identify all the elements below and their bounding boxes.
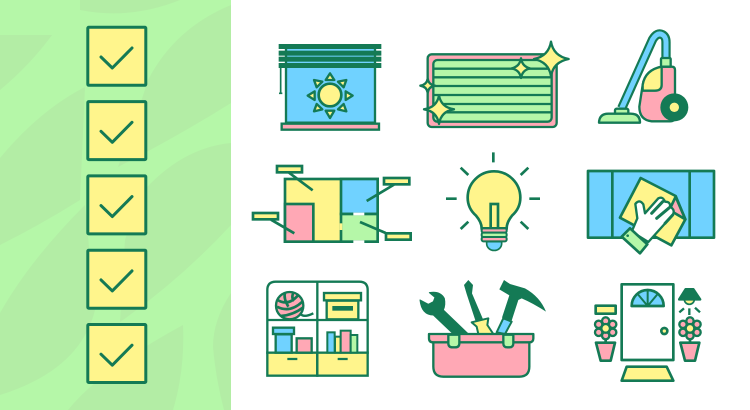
yarn ball (276, 292, 313, 319)
icon: storage shelf (267, 282, 368, 376)
icon: front door with flowers (595, 284, 701, 381)
icon: floor plan (253, 166, 411, 242)
left flower and pot (595, 317, 616, 361)
storage box (324, 293, 361, 319)
icon: light bulb (446, 152, 540, 250)
porch lamp (679, 289, 700, 315)
screwdriver (464, 280, 493, 334)
icon: window blinds with sun (279, 44, 381, 130)
fan window (632, 290, 664, 306)
right flower and pot (679, 317, 701, 361)
icon: hand wiping window (588, 171, 714, 253)
icon: sparkling clean blinds (420, 42, 569, 127)
wrench (420, 292, 468, 334)
checkbox 1 (88, 27, 146, 85)
icon: vacuum cleaner (599, 34, 688, 123)
checkbox 5 (88, 324, 146, 382)
hammer (497, 280, 546, 334)
panel: green checklist background (0, 0, 231, 410)
icon: toolbox (420, 280, 546, 377)
checklist (88, 27, 146, 383)
checkbox 3 (88, 176, 146, 234)
checkbox 2 (88, 102, 146, 160)
checkbox 4 (88, 250, 146, 308)
